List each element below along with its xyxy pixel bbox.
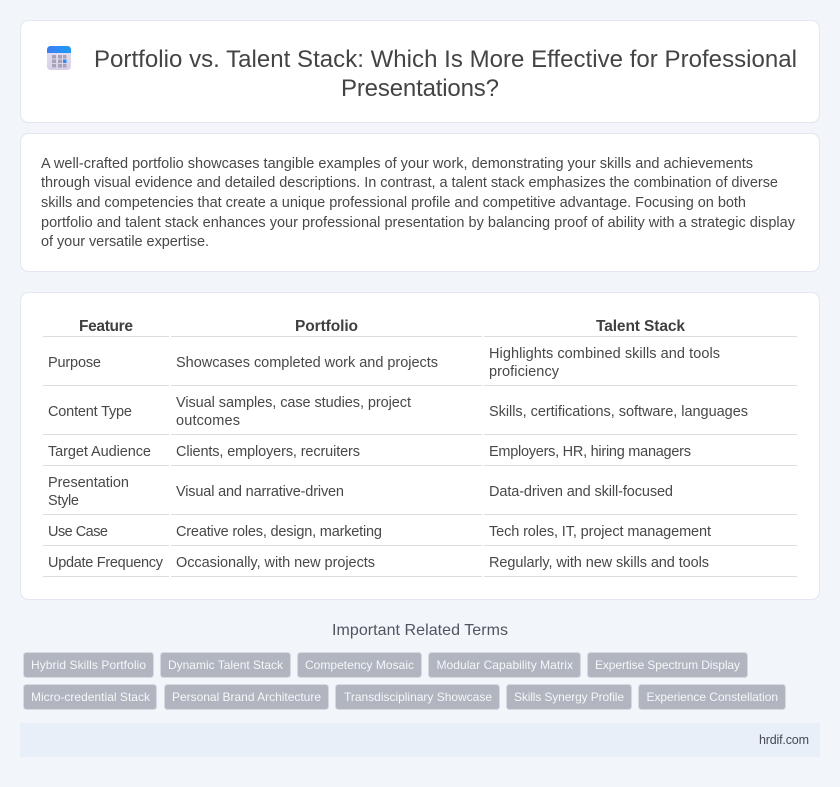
text block: description: portfolio and talent stack enhances your professional presentation by balancing proof of ability with a strategic display bbox=[41, 215, 796, 231]
row: update frequency: Update Frequency bbox=[48, 555, 164, 571]
row: use case: Creative roles, design, marketing bbox=[176, 524, 382, 540]
row: purpose: Purpose bbox=[48, 355, 101, 371]
tags: related terms bbox=[24, 652, 786, 710]
row: update frequency bbox=[48, 555, 709, 571]
text block: description bbox=[41, 156, 796, 250]
text block: description: of your versatile expertise. bbox=[41, 234, 209, 250]
row: presentation style: Presentation bbox=[48, 475, 129, 491]
tags: related terms: Modular Capability Matrix bbox=[436, 658, 573, 672]
tags: related terms: Hybrid Skills Portfolio bbox=[31, 658, 146, 672]
row: purpose: proficiency bbox=[489, 364, 560, 380]
title: Portfolio vs. Talent Stack: Which Is More Effective for Professional bbox=[94, 46, 797, 73]
tags: related terms: Skills Synergy Profile bbox=[514, 690, 624, 704]
tags: related terms: Competency Mosaic bbox=[305, 658, 414, 672]
title bbox=[94, 46, 797, 102]
footer: hrdif.com bbox=[759, 733, 809, 747]
row: update frequency: Regularly, with new skills and tools bbox=[489, 555, 709, 571]
table header row: Talent Stack bbox=[596, 318, 685, 335]
tags: related terms: Dynamic Talent Stack bbox=[168, 658, 284, 672]
text block: description: through visual evidence and detailed descriptions. In contrast, a talent stack emphasizes the combination of diverse bbox=[41, 175, 778, 191]
tags: related terms: Micro-credential Stack bbox=[31, 690, 151, 704]
text block: description: A well-crafted portfolio showcases tangible examples of your work, demonstrating your skills and achievements bbox=[41, 156, 753, 172]
row: content type: Skills, certifications, software, languages bbox=[489, 404, 748, 420]
row: content type: Visual samples, case studies, project bbox=[176, 395, 411, 411]
row: presentation style: Style bbox=[48, 493, 79, 509]
row: target audience: Clients, employers, recruiters bbox=[176, 444, 360, 460]
row: use case bbox=[48, 524, 711, 540]
table header row bbox=[79, 318, 685, 335]
footer bbox=[20, 723, 820, 757]
row: presentation style: Visual and narrative-driven bbox=[176, 484, 344, 500]
panel: comparison table bbox=[20, 292, 820, 600]
row: content type bbox=[48, 395, 748, 429]
tags: related terms: Expertise Spectrum Display bbox=[595, 658, 740, 672]
row: content type: Content Type bbox=[48, 404, 132, 420]
row: purpose: Showcases completed work and projects bbox=[176, 355, 438, 371]
row: presentation style bbox=[48, 475, 673, 509]
icon: calendar bbox=[47, 46, 71, 70]
row: target audience bbox=[48, 444, 691, 460]
table header row: Feature bbox=[79, 318, 133, 335]
row: content type: outcomes bbox=[176, 413, 240, 429]
panel: header bbox=[20, 20, 820, 122]
tags: related terms: Transdisciplinary Showcase bbox=[344, 690, 492, 704]
row: target audience: Employers, HR, hiring managers bbox=[489, 444, 691, 460]
text block: description: skills and competencies that create a unique professional profile and competitive advantage. Focusing on both bbox=[41, 195, 746, 211]
row: purpose: Highlights combined skills and tools bbox=[489, 346, 720, 362]
tags: related terms: Personal Brand Architecture bbox=[172, 690, 321, 704]
row: purpose bbox=[48, 346, 720, 380]
panel: description bbox=[20, 134, 820, 272]
title: Presentations? bbox=[341, 75, 499, 102]
row: use case: Use Case bbox=[48, 524, 108, 540]
row: target audience: Target Audience bbox=[48, 444, 151, 460]
row: update frequency: Occasionally, with new projects bbox=[176, 555, 375, 571]
heading: related terms: Important Related Terms bbox=[332, 622, 508, 639]
table header row: Portfolio bbox=[295, 318, 358, 335]
row: presentation style: Data-driven and skill-focused bbox=[489, 484, 673, 500]
tags: related terms: Experience Constellation bbox=[646, 690, 778, 704]
row: use case: Tech roles, IT, project management bbox=[489, 524, 711, 540]
